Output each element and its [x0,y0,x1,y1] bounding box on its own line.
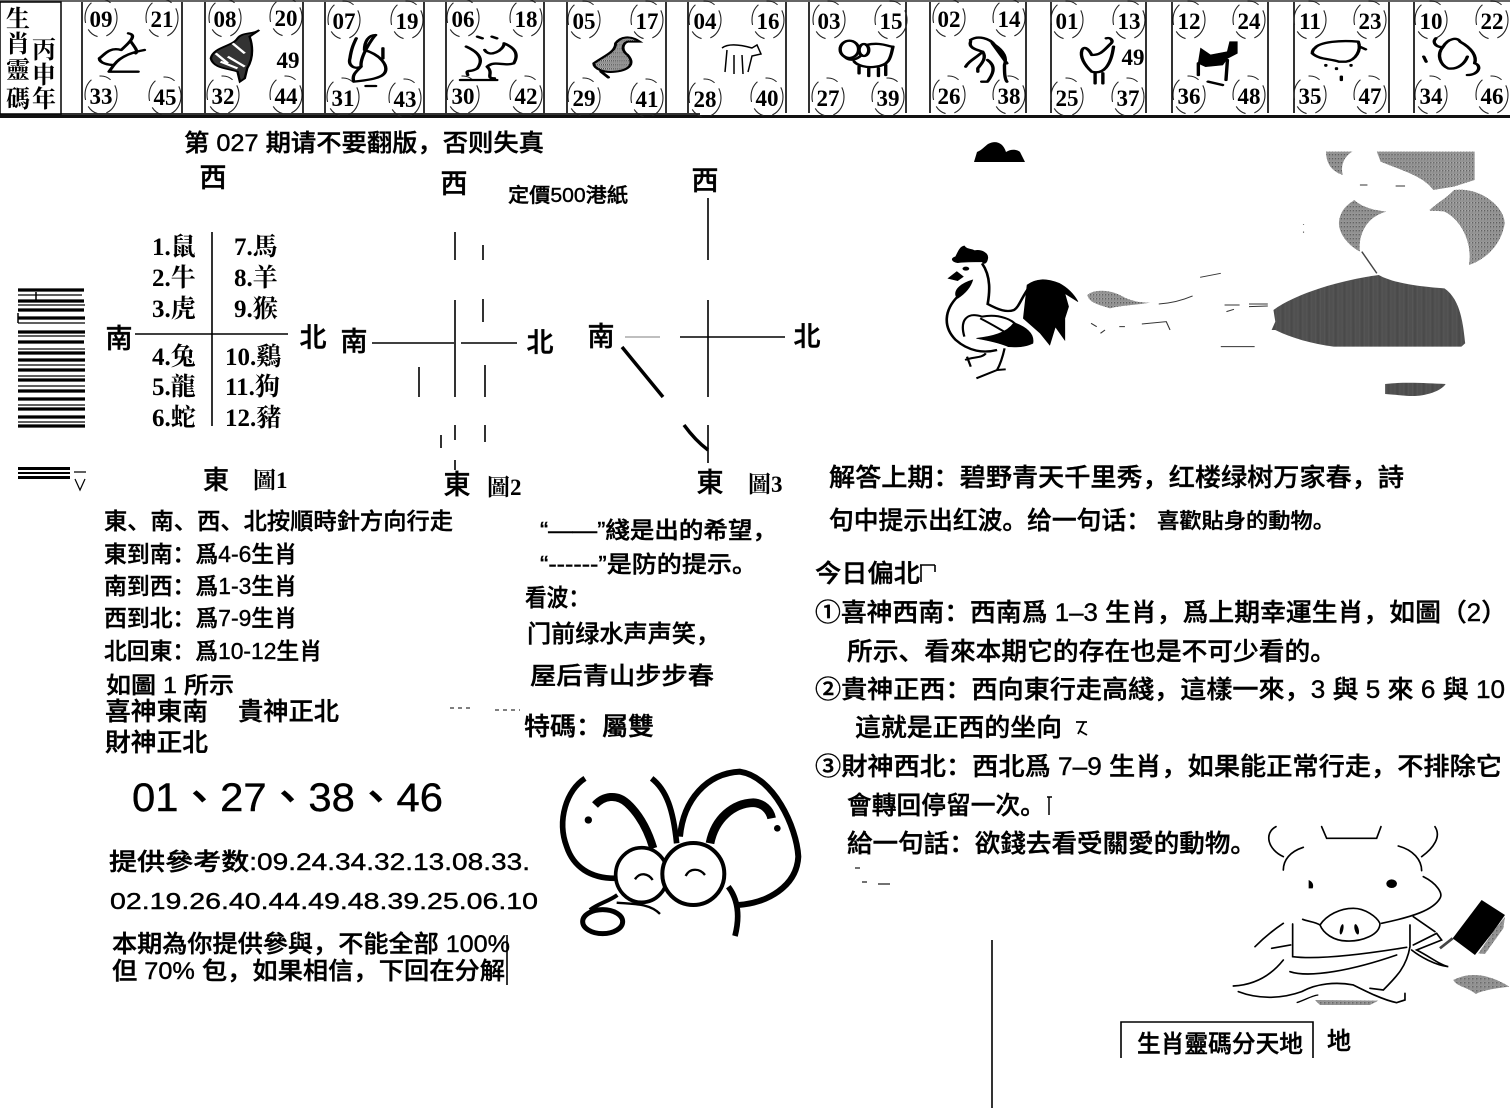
cell: dragon: 18 [514,7,538,32]
cell: dragon: 30 [452,84,474,109]
illustration: cartoon mouse [563,772,798,936]
diagram: figure 3 compass: 圖3 [748,472,782,497]
cell: dragon [446,0,544,114]
cell: pig: 47 [1358,84,1382,109]
footer vertical rule [991,940,993,1108]
diagram: figure 1 compass with zodiac list: 8.羊 [234,264,278,292]
cell: tiger: 44 [274,84,298,109]
diagram: figure 1 compass with zodiac list: 1.鼠 [152,233,196,261]
cell: rooster: 01 [1056,9,1078,34]
cell: snake: 41 [636,87,658,112]
cell: horse: 04 [694,9,717,34]
text block: walking directions: 西到北：爲7-9生肖 [104,605,297,631]
cell: rat (mouse): 34 [1420,84,1443,109]
diagram: figure 1 compass with zodiac list: 12.豬 [225,404,281,432]
cell: monkey: 26 [938,84,960,109]
note text: 但 70% 包，如果相信，下回在分解 [112,958,505,985]
diagram: figure 2 compass: 南 [340,327,368,357]
diagram: figure 3 compass: 南 [588,322,614,352]
cell: rooster: 37 [1116,86,1140,111]
cell: tiger [205,0,303,114]
text block: walking directions: 如圖 1 所示 [106,672,234,698]
cell: pig: 11 [1299,9,1321,34]
diagram: figure 3 compass [588,166,820,498]
panel: zodiac number strip [0,0,1510,118]
text block: walking directions: 東到南：爲4-6生肖 [104,541,297,567]
strip title: 生肖靈碼 丙申年: 靈 [6,57,30,84]
cell: rooster: 25 [1056,86,1078,111]
diagram: figure 2 compass: 圖2 [487,475,522,500]
strip title: 生肖靈碼 丙申年: 碼 [6,86,30,113]
cell: monkey: 02 [938,7,960,32]
illustration: rooster [947,246,1078,378]
cell: tiger: 08 [214,7,236,32]
cell: rabbit: 07 [332,9,356,34]
text block: walking directions: 北回東：爲10-12生肖 [104,638,322,664]
cell: rat (mouse): 46 [1480,84,1504,109]
cell: rat: 21 [150,7,174,32]
text block: last issue answer [829,464,1404,535]
key numbers: 01、27、38、46 [132,776,443,820]
text block: today's explanation: ②貴神正西：西向東行走高綫，這樣一來，3 與 5 來 6 與 10 [815,676,1505,704]
cell: dog: 36 [1178,84,1200,109]
illustration: pig with cleaver [1233,827,1509,1005]
label box: 生肖靈碼分天地: 地 [1327,1028,1351,1055]
text block: last issue answer: 句中提示出红波。给一句话： [829,507,1151,535]
text block: hints and wave clue: 看波： [525,585,590,612]
cell: horse: 28 [694,87,716,112]
cell: dog [1172,1,1268,114]
strip title: 生肖靈碼 丙申年: 生 [6,6,30,33]
cell: tiger: 20 [274,6,298,31]
cell: rat: 09 [90,7,112,32]
cell: pig [1294,1,1389,114]
reference numbers: 02.19.26.40.44.49.48.39.25.06.10 [110,888,538,914]
strip title: 生肖靈碼 丙申年: 肖 [6,31,30,58]
cell: tiger: 32 [212,84,234,109]
cell: monkey [930,0,1026,114]
diagram: figure 1 compass with zodiac list: 東 [203,465,229,495]
cell: snake [567,1,666,117]
strip title: 生肖靈碼 丙申年: 申 [32,62,56,89]
cell: snake: 29 [572,86,596,111]
text block: hints and wave clue: 特碼：屬雙 [524,713,654,741]
strip title: 生肖靈碼 丙申年 [0,2,61,114]
cell: rooster: 49 [1122,45,1144,70]
text block: hints and wave clue [450,517,777,741]
text block: walking directions: 喜神東南 [105,698,208,726]
label box: 生肖靈碼分天地 [1121,1022,1351,1058]
diagram: figure 1 compass with zodiac list: 2.牛 [152,264,196,292]
cell: monkey: 14 [998,7,1021,32]
cell: rooster: 13 [1118,9,1140,34]
text block: today's explanation [815,560,1507,884]
cell: sheep (ram): 39 [876,86,900,111]
text block: walking directions: 東、南、西、北按順時針方向行走 [104,508,453,534]
cell: rat: 45 [154,85,176,110]
diagram: figure 2 compass [340,169,554,500]
diagram: figure 1 compass with zodiac list: 4.兔 [152,343,196,371]
text block: last issue answer: 喜歡貼身的動物。 [1157,510,1335,533]
text block: today's explanation: ①喜神西南：西南爲 1–3 生肖，爲上期幸運生肖，如圖（2） [815,599,1507,627]
cell: rabbit: 19 [396,9,418,34]
text block: walking directions: 貴神正北 [238,698,339,726]
diagram: figure 1 compass with zodiac list: 6.蛇 [152,404,196,432]
diagram: figure 1 compass with zodiac list: 5.龍 [152,373,196,401]
illustration: woman seen from behind [1087,152,1505,396]
diagram: figure 1 compass with zodiac list: 圖1 [253,468,288,493]
diagram: figure 1 compass with zodiac list: 南 [106,324,132,354]
text block: last issue answer: 解答上期：碧野青天千里秀，红楼绿树万家春，詩 [829,464,1404,492]
text block: walking directions: 財神正北 [105,729,208,757]
text block: hints and wave clue: “------”是防的提示。 [540,551,757,577]
cell: dragon: 06 [452,7,474,32]
cell: sheep (ram) [809,1,907,116]
text block: walking directions [104,508,453,757]
diagram: figure 1 compass with zodiac list: 11.狗 [225,373,280,401]
cell: rat (mouse) [1414,1,1508,114]
cell: dragon: 42 [514,84,538,109]
text block: today's explanation: 給一句話：欲錢去看受關愛的動物。 [847,830,1256,858]
note text: 本期為你提供參與，不能全部 100% [112,931,510,958]
diagram: figure 1 compass with zodiac list: 3.虎 [152,295,196,323]
diagram: figure 3 compass: 北 [794,322,820,352]
text block: hints and wave clue: “——”綫是出的希望， [540,517,777,543]
label box: 生肖靈碼分天地: 生肖靈碼分天地 [1137,1031,1303,1058]
reference numbers [109,849,538,914]
cell: pig: 23 [1358,9,1382,34]
cell: horse: 16 [756,9,780,34]
diagram: figure 1 compass with zodiac list: 9.猴 [234,295,278,323]
cell: dog: 12 [1178,9,1200,34]
diagram: figure 1 compass with zodiac list: 7.馬 [234,233,278,261]
text block: walking directions: 南到西：爲1-3生肖 [104,573,297,599]
cell: sheep (ram): 03 [818,9,840,34]
strip title: 生肖靈碼 丙申年: 年 [32,85,56,113]
diagram: figure 1 compass with zodiac list: 10.鷄 [225,343,281,371]
text block: today's explanation: 這就是正西的坐向 [855,714,1062,742]
cell: pig: 35 [1298,84,1322,109]
text block: today's explanation: 今日偏北 [815,560,920,588]
cell: rabbit: 43 [394,87,416,112]
cell: dog: 48 [1238,84,1260,109]
diagram: figure 1 compass with zodiac list: 北 [300,323,326,353]
diagram: figure 2 compass: 西 [440,169,468,199]
text block: hints and wave clue: 屋后青山步步春 [530,663,714,690]
cell: snake: 17 [636,9,658,34]
text block: today's explanation: 所示、看來本期它的存在也是不可少看的。 [847,638,1336,666]
cell: snake: 05 [572,9,596,34]
cell: sheep (ram): 27 [816,86,840,111]
cell: rabbit: 31 [332,86,354,111]
text block: today's explanation: ③財神西北：西北爲 7–9 生肖，如果能正常行走，不排除它 [815,753,1502,781]
cell: dog: 24 [1238,9,1261,34]
cell: horse: 40 [756,86,778,111]
note text [112,931,510,985]
text block: hints and wave clue: 门前绿水声声笑， [527,621,720,648]
diagram: figure 2 compass: 北 [526,328,554,358]
cell: monkey: 38 [998,84,1020,109]
title: 第 027 期请不要翻版，否则失真 [184,130,544,157]
diagram: figure 3 compass: 西 [692,166,718,196]
diagram: figure 2 compass: 東 [444,470,470,500]
cell: rat (mouse): 22 [1480,9,1504,34]
strip title: 生肖靈碼 丙申年: 丙 [32,37,56,64]
cell: rat: 33 [90,84,112,109]
cell: rat [82,0,182,115]
icon: mountain silhouette [974,142,1025,162]
price label: 定價500港紙 [508,184,628,207]
diagram: figure 1 compass with zodiac list [106,163,326,495]
cell: tiger: 49 [276,48,300,73]
barcode [18,290,86,490]
cell: rabbit [325,1,424,117]
cell: rat (mouse): 10 [1420,9,1442,34]
cell: rooster [1051,1,1146,116]
diagram: figure 1 compass with zodiac list: 西 [200,163,226,193]
cell: sheep (ram): 15 [880,9,902,34]
reference numbers: 提供參考数:09.24.34.32.13.08.33. [109,849,530,876]
diagram: figure 3 compass: 東 [696,468,724,498]
cell: horse [688,1,786,117]
text block: today's explanation: 會轉回停留一次。 [847,792,1045,820]
